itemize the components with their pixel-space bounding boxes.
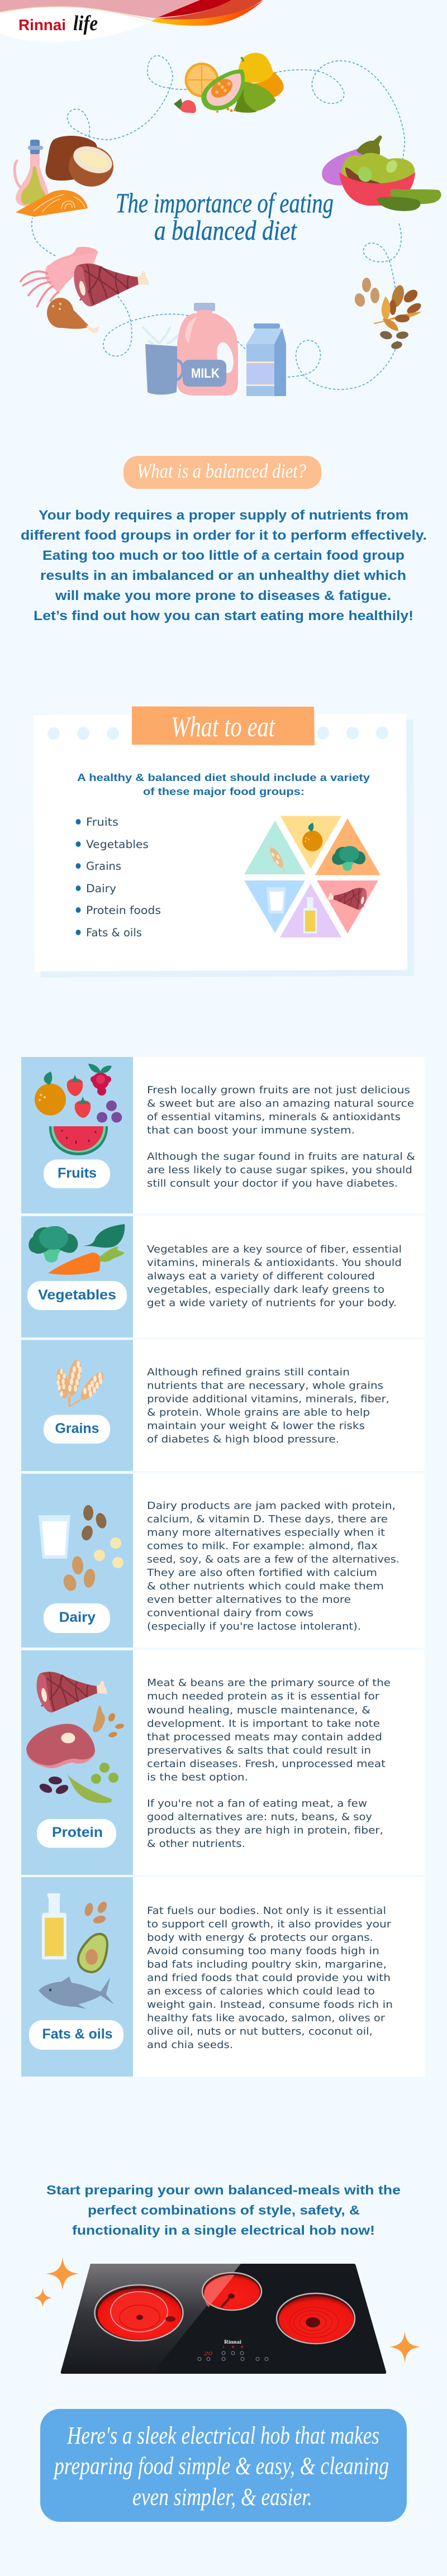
icon: fats and oils [39, 1893, 114, 2009]
MILK label: MILK [191, 366, 220, 381]
icon: squid, ham and chicken drumstick [20, 247, 150, 334]
logo: Rinnai: Rinnai [18, 16, 66, 34]
hob brand mark: Rinnai [224, 2340, 241, 2345]
text: dairy description: comes to milk. For example: almond, flax [147, 1541, 378, 1552]
text: protein description: that processed meats may contain added [147, 1732, 382, 1743]
panel: food group table [21, 1057, 425, 2077]
pill label: Fruits [44, 1160, 110, 1188]
pill label: Vegetables [27, 1281, 127, 1310]
text: dairy description: (especially if you're lactose intolerant). [147, 1621, 361, 1632]
subheading: of these major food groups: [143, 785, 305, 797]
logo: life: life [73, 12, 98, 35]
closing call to action [46, 2183, 401, 2237]
text: vegetables description: always eat a variety of different coloured [147, 1271, 375, 1282]
burner: left [95, 2285, 183, 2341]
row: fruits [35, 1064, 415, 1189]
text: vegetables description: get a wide variety of nutrients for your body. [147, 1298, 397, 1309]
banner: What to eat: What to eat [171, 711, 275, 743]
pill heading: What is a balanced diet? [123, 456, 321, 489]
icon: vegetables [28, 1224, 125, 1275]
row: protein [26, 1672, 391, 1850]
icon: oil bottle, coconut and salmon [15, 136, 116, 217]
text: dairy description: Dairy products are jam packed with protein, [147, 1501, 396, 1512]
pill label: Dairy: Dairy [59, 1610, 96, 1625]
text: fruits description: still consult your doctor if you have diabetes. [147, 1178, 398, 1189]
icon: dairy [39, 1505, 123, 1593]
pill label: Grains: Grains [55, 1421, 99, 1436]
text: dairy description: conventional dairy from cows [147, 1608, 313, 1619]
text: fats and oils description: an excess of calories which could lead to [147, 1986, 375, 1997]
text: protein description: wound healing, muscle maintenance, & [147, 1705, 370, 1716]
text: fruits description: & sweet but are also an amazing natural source [147, 1098, 414, 1110]
text: fruits description: Although the sugar found in fruits are natural & [147, 1151, 415, 1163]
icon: wheat [54, 1359, 107, 1407]
timer display: 20 [203, 2351, 212, 2356]
text: fats and oils description: and chia seeds. [147, 2040, 233, 2051]
icon: fruits cluster [174, 53, 284, 113]
text: grains description: maintain your weight & lower the risks [147, 1421, 365, 1432]
chart: food group hexagon of triangles [244, 816, 381, 937]
text: fruits description: are less likely to cause sugar spikes, you should [147, 1165, 412, 1176]
text: protein description [147, 1678, 391, 1850]
text: fats and oils description: and fried foods that could provide you with [147, 1973, 391, 1984]
list of food groups: Protein foods [86, 904, 161, 917]
text: protein description: certain diseases. Fresh, unprocessed meat [147, 1759, 386, 1770]
icon: protein foods [26, 1672, 125, 1803]
row: grains [44, 1359, 389, 1445]
text: fruits description: that can boost your immune system. [147, 1125, 355, 1136]
text: dairy description: even better alternatives to the more [147, 1594, 351, 1606]
text: fats and oils description: body with energy & protects our organs. [147, 1932, 373, 1944]
text: fats and oils description: Avoid consuming too many foods high in [147, 1946, 379, 1957]
row: dairy [39, 1501, 400, 1633]
list of food groups [76, 816, 161, 939]
text: grains description: & protein. Whole grains are able to help [147, 1407, 370, 1418]
subheading [77, 772, 370, 797]
burner: right [277, 2293, 355, 2344]
icon: salad bowl, eggplant and cucumbers [322, 135, 441, 211]
header wave with logo [0, 0, 264, 42]
text: protein description: good alternatives are: nuts, beans, & soy [147, 1812, 372, 1823]
pill label: Fruits: Fruits [58, 1165, 97, 1181]
text: protein description: & other nutrients. [147, 1839, 245, 1850]
text: fruits description: Fresh locally grown fruits are not just delicious [147, 1085, 410, 1096]
text: vegetables description: Vegetables are a key source of fiber, essential [147, 1244, 402, 1255]
text: fats and oils description [147, 1906, 393, 2051]
text: fats and oils description: to support cell growth, it also provides your [147, 1919, 392, 1930]
text: grains description: of diabetes & high blood pressure. [147, 1434, 339, 1445]
text: grains description: Although refined grains still contain [147, 1367, 350, 1378]
text: fats and oils description: bad fats including poultry skin, margarine, [147, 1959, 387, 1970]
title: The importance of eating [116, 187, 334, 218]
text: dairy description: many more alternatives especially when it [147, 1527, 385, 1539]
text: dairy description [146, 1501, 400, 1632]
text: fats and oils description: weight gain. Instead, consume foods rich in [147, 1999, 393, 2011]
text: grains description: nutrients that are necessary, whole grains [147, 1380, 383, 1392]
text: grains description [147, 1367, 389, 1445]
closing call to action: functionality in a single electrical hob now! [72, 2223, 375, 2237]
pill label: Fats & oils: Fats & oils [42, 2026, 113, 2042]
pill label: Fats & oils [29, 2020, 123, 2050]
text: protein description: If you're not a fan of eating meat, a few [147, 1798, 367, 1810]
intro paragraph: different food groups in order for it to perform effectively. [21, 528, 427, 543]
pill label: Protein [37, 1819, 116, 1848]
text: protein description: is the best option. [147, 1772, 248, 1783]
callout: blue closing message: even simpler, & easier. [132, 2483, 312, 2511]
list of food groups: Grains [86, 860, 121, 873]
panel: what to eat card [34, 706, 414, 978]
list of food groups: Fruits [86, 816, 118, 828]
text: protein description: development. It is important to take note [147, 1718, 380, 1730]
icon: milk mug, jug and carton [142, 303, 286, 396]
text: protein description: products as they are high in protein, fiber, [147, 1825, 383, 1836]
text: dairy description: They are also often fortified with calcium [146, 1568, 377, 1579]
pill label: Dairy [44, 1603, 110, 1633]
closing call to action: Start preparing your own balanced-meals with the [46, 2183, 401, 2197]
text: protein description: much needed protein as it is essential for [147, 1691, 380, 1702]
intro paragraph: Your body requires a proper supply of nutrients from [39, 508, 408, 523]
title: a balanced diet [154, 215, 297, 246]
text: vegetables description: vegetables, especially dark leafy greens to [147, 1284, 384, 1296]
intro paragraph: will make you more prone to diseases & fatigue. [55, 588, 391, 603]
icon: fruits [35, 1064, 122, 1155]
text: vegetables description: vitamins, minerals & antioxidants. You should [147, 1258, 402, 1269]
callout: blue closing message [40, 2409, 407, 2522]
icon: sparkles [34, 2257, 421, 2363]
dashed looping paths around the title [32, 56, 405, 389]
intro paragraph: Let’s find out how you can start eating more healthily! [34, 608, 413, 623]
text: fats and oils description: Fat fuels our bodies. Not only is it essential [147, 1906, 386, 1917]
list of food groups: Fats & oils [86, 926, 142, 939]
intro paragraph: results in an imbalanced or an unhealthy diet which [40, 568, 406, 583]
title [116, 187, 334, 246]
text: protein description: preservatives & salts that could result in [147, 1745, 371, 1756]
pill heading: What is a balanced diet?: What is a balanced diet? [137, 460, 306, 482]
text: protein description: Meat & beans are the primary source of the [147, 1678, 391, 1689]
illustration: electrical hob [61, 2264, 386, 2374]
text: vegetables description [147, 1244, 402, 1309]
icon: nuts and seeds [353, 278, 423, 350]
pill label: Vegetables: Vegetables [38, 1287, 116, 1303]
banner: What to eat [132, 706, 315, 745]
touch controls [198, 2351, 268, 2361]
list of food groups: Dairy [86, 882, 116, 895]
burner: middle [202, 2273, 261, 2310]
subheading: A healthy & balanced diet should include a variety [77, 772, 370, 783]
row: fats and oils [29, 1893, 393, 2051]
text: fruits description [147, 1085, 415, 1189]
text: dairy description: calcium, & vitamin D. These days, there are [147, 1514, 388, 1525]
intro paragraph: Eating too much or too little of a certain food group [42, 548, 405, 563]
text: fats and oils description: healthy fats like avocado, salmon, olives or [147, 2013, 386, 2024]
closing call to action: perfect combinations of style, safety, & [88, 2203, 360, 2217]
list of food groups: Vegetables [86, 838, 149, 851]
intro paragraph [21, 508, 427, 623]
pill label: Protein: Protein [52, 1825, 103, 1840]
text: fruits description: of essential vitamins, minerals & antioxidants [147, 1112, 401, 1123]
text: fats and oils description: olive oil, nuts or nut butters, coconut oil, [147, 2026, 373, 2037]
callout: blue closing message: Here's a sleek electrical hob that makes [66, 2422, 379, 2449]
pill label: Grains [44, 1415, 110, 1444]
row: vegetables [27, 1224, 402, 1310]
text: dairy description: seed, soy, & oats are a few of the alternatives. [147, 1554, 400, 1565]
text: grains description: provide additional vitamins, minerals, fiber, [147, 1394, 389, 1405]
text: dairy description: & other nutrients which could make them [147, 1581, 384, 1592]
